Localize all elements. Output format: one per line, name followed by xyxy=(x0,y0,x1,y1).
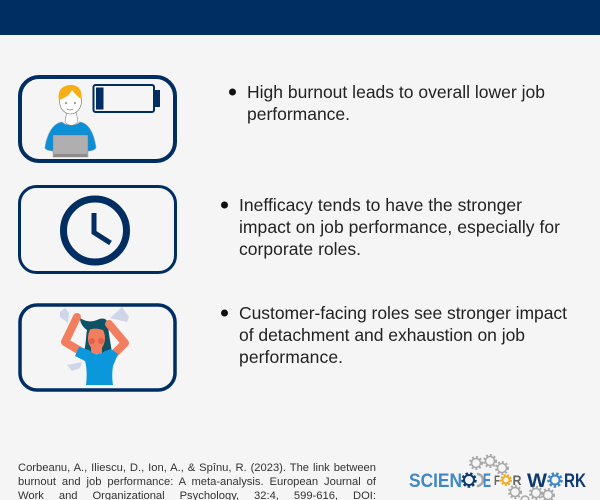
logo wordmark: E xyxy=(483,471,491,492)
citation: burnout and job performance: A meta-analysis. European Journal of xyxy=(18,476,376,488)
logo wordmark: SCIEN xyxy=(409,471,462,492)
bullet: lower job performance xyxy=(229,82,545,124)
logo wordmark: F xyxy=(494,472,500,488)
bullet: customer-facing roles: performance. xyxy=(239,347,343,367)
header band xyxy=(0,0,600,35)
bullet: inefficacy impact: impact on job performance, especially for xyxy=(239,217,560,237)
bullet: customer-facing roles xyxy=(221,303,567,367)
panel: low energy worker icon xyxy=(20,77,175,161)
logo wordmark: W xyxy=(527,471,547,492)
icon: stressed woman xyxy=(65,317,125,385)
icon: flying papers xyxy=(60,307,129,371)
icon: low battery xyxy=(94,85,160,112)
bullet: lower job performance: High burnout leads to overall lower job xyxy=(247,82,545,102)
citation: Corbeanu, A., Iliescu, D., Ion, A., & Spînu, R. (2023). The link between xyxy=(18,462,376,474)
bullet: customer-facing roles: of detachment and exhaustion on job xyxy=(239,325,525,345)
panel: stressed woman icon xyxy=(20,305,175,390)
bullet: inefficacy impact xyxy=(221,195,560,259)
logo wordmark: R xyxy=(512,472,522,488)
panel: clock icon xyxy=(20,186,176,272)
bullet: lower job performance: performance. xyxy=(247,104,350,124)
bullet: inefficacy impact: corporate roles. xyxy=(239,239,361,259)
icon: clock xyxy=(64,199,126,262)
logo: Science for Work xyxy=(409,455,586,500)
bullet: inefficacy impact: Inefficacy tends to have the stronger xyxy=(239,195,522,215)
citation xyxy=(18,462,376,500)
icon: person at laptop xyxy=(45,85,96,157)
logo wordmark xyxy=(409,471,586,492)
bullet: customer-facing roles: Customer-facing roles see stronger impact xyxy=(239,303,567,323)
icon: lower gears xyxy=(509,486,554,500)
logo wordmark: RK xyxy=(564,471,586,492)
icon: upper gears xyxy=(470,455,508,474)
